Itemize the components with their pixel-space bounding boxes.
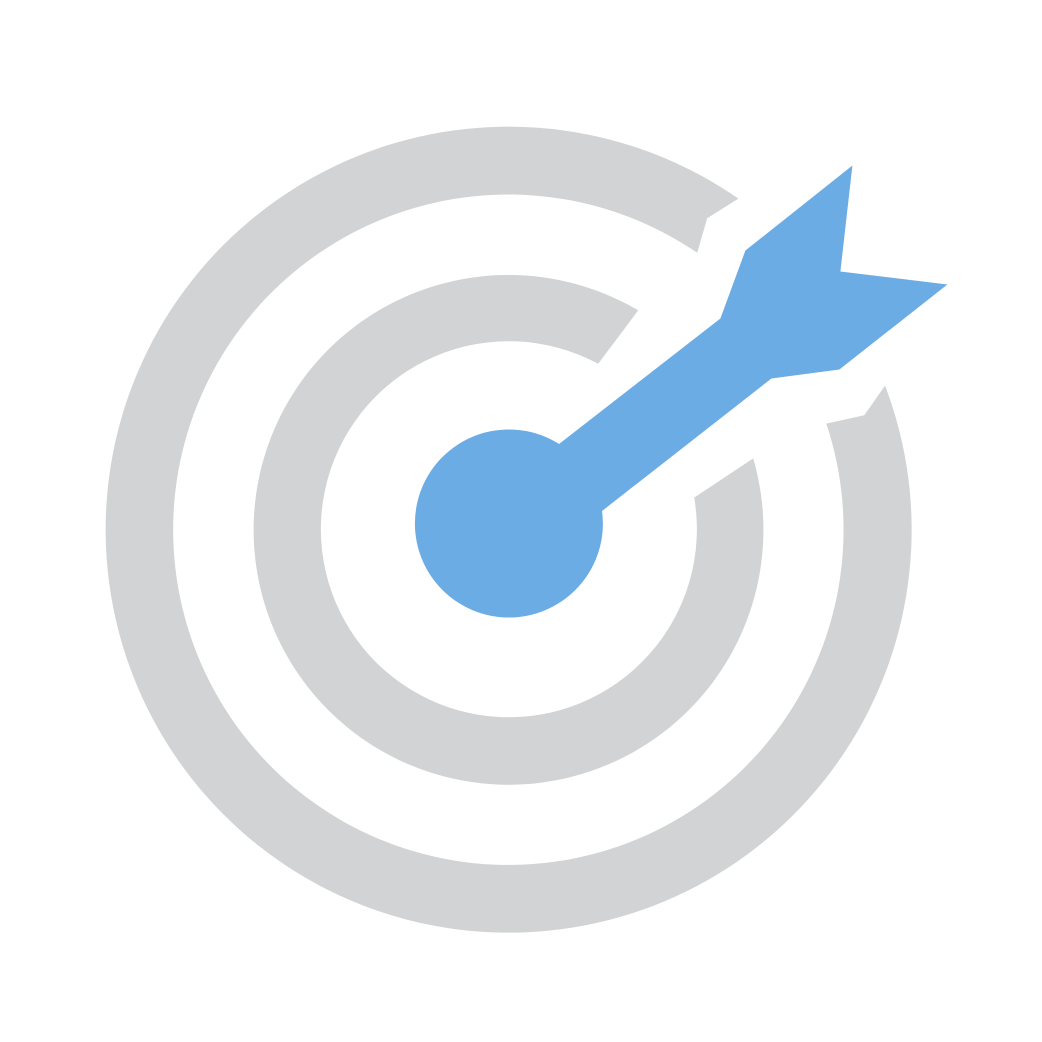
arrow with bullseye bbox=[415, 166, 947, 618]
outer target ring bbox=[106, 127, 912, 933]
bullseye circle bbox=[415, 430, 603, 618]
middle target ring bbox=[254, 275, 763, 785]
arrow shaft and fletching bbox=[558, 166, 947, 520]
